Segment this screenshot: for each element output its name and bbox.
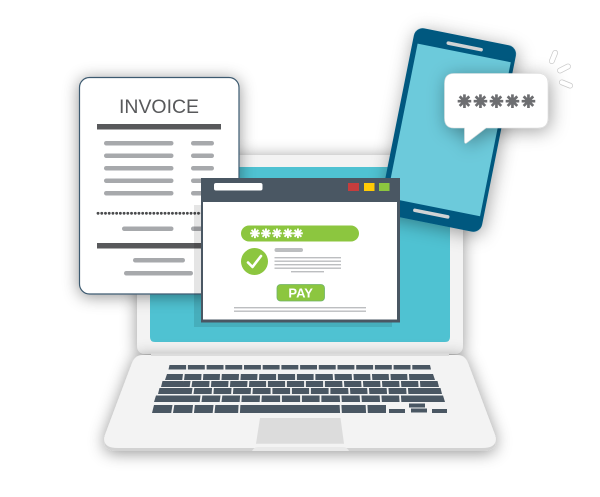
password field: ✳ bbox=[261, 226, 271, 240]
phone screen bbox=[387, 44, 511, 216]
bubble password stars: ✳ bbox=[522, 92, 535, 111]
password field: ✳ bbox=[272, 226, 282, 240]
password field: ✳ bbox=[283, 226, 293, 240]
notification sparks bbox=[549, 50, 573, 89]
invoice line items bbox=[104, 141, 214, 196]
dotted divider bbox=[98, 212, 221, 215]
yellow button bbox=[364, 183, 374, 191]
footer lines bbox=[124, 258, 193, 276]
password field: ✳ bbox=[250, 226, 260, 240]
phone body bbox=[378, 27, 518, 233]
pay button bbox=[277, 284, 324, 301]
phone bbox=[378, 27, 518, 233]
footer lines bbox=[234, 307, 366, 312]
keyboard bbox=[152, 364, 447, 414]
laptop lid bbox=[137, 155, 463, 354]
bubble password stars bbox=[458, 92, 535, 111]
speech bubble bbox=[444, 74, 548, 143]
header rule bbox=[97, 124, 221, 130]
top speaker bbox=[446, 41, 483, 52]
icon: check mark bbox=[241, 248, 268, 275]
window shadow bbox=[194, 205, 392, 327]
hinge bbox=[151, 354, 449, 356]
trackpad bbox=[256, 418, 344, 444]
laptop bbox=[104, 155, 496, 451]
bubble password stars: ✳ bbox=[490, 92, 503, 111]
subtotal line bbox=[122, 226, 214, 231]
laptop screen bbox=[150, 167, 450, 342]
red button bbox=[348, 183, 359, 191]
payment window bbox=[201, 178, 400, 322]
bubble password stars: ✳ bbox=[458, 92, 471, 111]
invoice sheet bbox=[80, 78, 239, 294]
front notch bbox=[252, 447, 349, 451]
confirmation text lines bbox=[274, 248, 341, 272]
bubble password stars: ✳ bbox=[506, 92, 519, 111]
bubble password stars: ✳ bbox=[474, 92, 487, 111]
home bar bbox=[413, 208, 450, 219]
invoice title: INVOICE bbox=[119, 96, 199, 118]
window content area bbox=[203, 202, 397, 320]
window frame bbox=[201, 178, 400, 322]
total rule bbox=[97, 243, 221, 248]
invoice document bbox=[80, 78, 239, 294]
address bar bbox=[214, 183, 262, 190]
laptop base bbox=[104, 355, 496, 451]
green button bbox=[379, 183, 390, 191]
password field: ✳ bbox=[293, 226, 303, 240]
pay button: PAY bbox=[288, 285, 313, 300]
password field bbox=[241, 226, 359, 242]
bubble shape bbox=[444, 74, 548, 143]
